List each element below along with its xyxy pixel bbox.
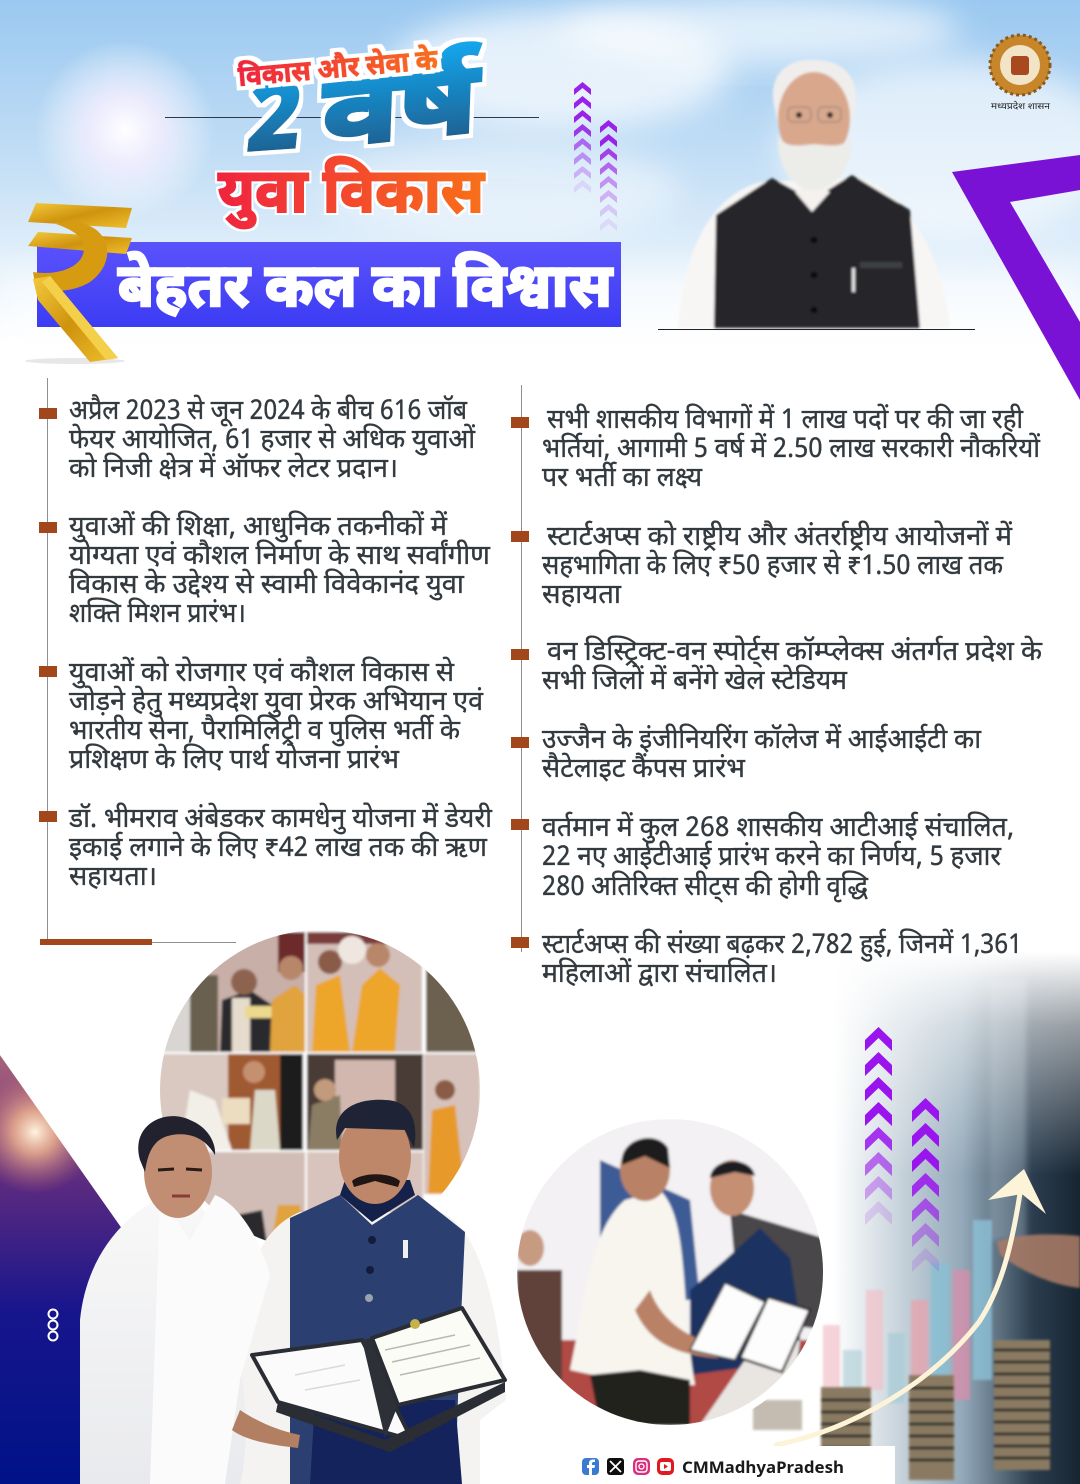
- photo collage circle: [158, 930, 480, 1250]
- icon: X: [607, 1458, 624, 1475]
- right column text: सहायता: [542, 580, 622, 615]
- small chevrons top: [574, 82, 617, 231]
- chief minister with certificate: [238, 1100, 506, 1484]
- right column text: सहभागिता के लिए ₹50 हजार से ₹1.50 लाख तक: [542, 549, 1004, 586]
- icon: gold rupee: [25, 203, 132, 364]
- icon: facebook: [582, 1458, 599, 1475]
- growth arrow: [776, 1169, 1046, 1445]
- heading: yuva vikas: युवा विकास: [218, 156, 485, 238]
- left column text: [68, 394, 493, 897]
- right column text: उज्जैन के इंजीनियरिंग कॉलेज में आईआईटी का: [542, 723, 982, 760]
- right column text: सैटेलाइट कैंपस प्रारंभ: [542, 752, 746, 789]
- social media bar: [567, 1446, 895, 1484]
- left column text: शक्ति मिशन प्रारंभ।: [69, 598, 246, 634]
- right column text: सभी शासकीय विभागों में 1 लाख पदों पर की जा रही: [547, 403, 1024, 440]
- right column text: महिलाओं द्वारा संचालित।: [542, 957, 777, 994]
- chart and coins backdrop: [492, 952, 1080, 1484]
- three small rings: [48, 1310, 58, 1340]
- right column text: सभी जिलों में बनेंगे खेल स्टेडियम: [542, 664, 848, 701]
- purple corner frame: [952, 155, 1080, 400]
- right column text: स्टार्टअप्स की संख्या बढ़कर 2,782 हुई, जिनमें 1,361: [542, 928, 1022, 965]
- left glow triangle: [0, 1055, 130, 1484]
- left column text: जोड़ने हेतु मध्यप्रदेश युवा प्रेरक अभियान एवं: [69, 685, 484, 722]
- right column text: वन डिस्ट्रिक्ट-वन स्पोर्ट्स कॉम्प्लेक्स अंतर्गत प्रदेश के: [547, 635, 1043, 672]
- header rule behind title: [165, 117, 539, 118]
- icon: youtube: [657, 1458, 674, 1475]
- right column text: [542, 403, 1043, 994]
- social handle: CMMadhyaPradesh: [682, 1459, 844, 1480]
- left column text: युवाओं की शिक्षा, आधुनिक तकनीकों में: [69, 510, 448, 547]
- left column text: भारतीय सेना, पैरामिलिट्री व पुलिस भर्ती के: [69, 714, 461, 751]
- emblem: Madhya Pradesh government: मध्यप्रदेश शासन: [991, 100, 1051, 113]
- right column text: भर्तियां, आगामी 5 वर्ष में 2.50 लाख सरकारी नौकरियों: [542, 432, 1041, 469]
- campaign logo: 2 years: विकास और सेवा के: [237, 42, 440, 98]
- right column text: 280 अतिरिक्त सीट्स की होगी वृद्धि: [542, 870, 868, 907]
- left column text: फेयर आयोजित, 61 हजार से अधिक युवाओं: [69, 423, 475, 460]
- right column text: 22 नए आईटीआई प्रारंभ करने का निर्णय, 5 हजार: [542, 840, 1002, 877]
- banner: better tomorrow: बेहतर कल का विश्वास: [118, 253, 614, 331]
- emblem: Madhya Pradesh government: [990, 35, 1051, 113]
- right column text: स्टार्टअप्स को राष्ट्रीय और अंतर्राष्ट्रीय आयोजनों में: [547, 520, 1013, 557]
- large chevrons bottom right: [865, 1027, 939, 1272]
- left column text: युवाओं को रोजगार एवं कौशल विकास से: [69, 656, 455, 693]
- photo circle: startup award: [510, 1112, 830, 1432]
- certificate folder: [252, 1308, 505, 1452]
- bullet markers: [39, 408, 529, 948]
- left column text: इकाई लगाने के लिए ₹42 लाख तक की ऋण: [69, 831, 487, 868]
- campaign logo: 2 years: 2: [242, 63, 307, 188]
- campaign logo: 2 years: वर्ष: [321, 41, 482, 188]
- left column text: विकास के उद्देश्य से स्वामी विवेकानंद युवा: [69, 568, 465, 605]
- portrait: prime minister: [678, 60, 950, 328]
- campaign logo: 2 years: [237, 41, 482, 188]
- sky background: [0, 0, 1080, 350]
- right column text: पर भर्ती का लक्ष्य: [542, 461, 703, 498]
- icon: instagram: [633, 1458, 650, 1475]
- left column text: अप्रैल 2023 से जून 2024 के बीच 616 जॉब: [69, 394, 468, 431]
- left column text: योग्यता एवं कौशल निर्माण के साथ सर्वांगीण: [69, 539, 490, 576]
- nurse in white coat: [80, 1116, 300, 1484]
- column rules: [40, 378, 522, 1030]
- left column text: को निजी क्षेत्र में ऑफर लेटर प्रदान।: [69, 452, 398, 489]
- right column text: वर्तमान में कुल 268 शासकीय आटीआई संचालित,: [542, 811, 1014, 848]
- left column text: प्रशिक्षण के लिए पार्थ योजना प्रारंभ: [69, 743, 400, 780]
- left column text: डॉ. भीमराव अंबेडकर कामधेनु योजना में डेयरी: [68, 802, 493, 839]
- left column text: सहायता।: [69, 862, 157, 897]
